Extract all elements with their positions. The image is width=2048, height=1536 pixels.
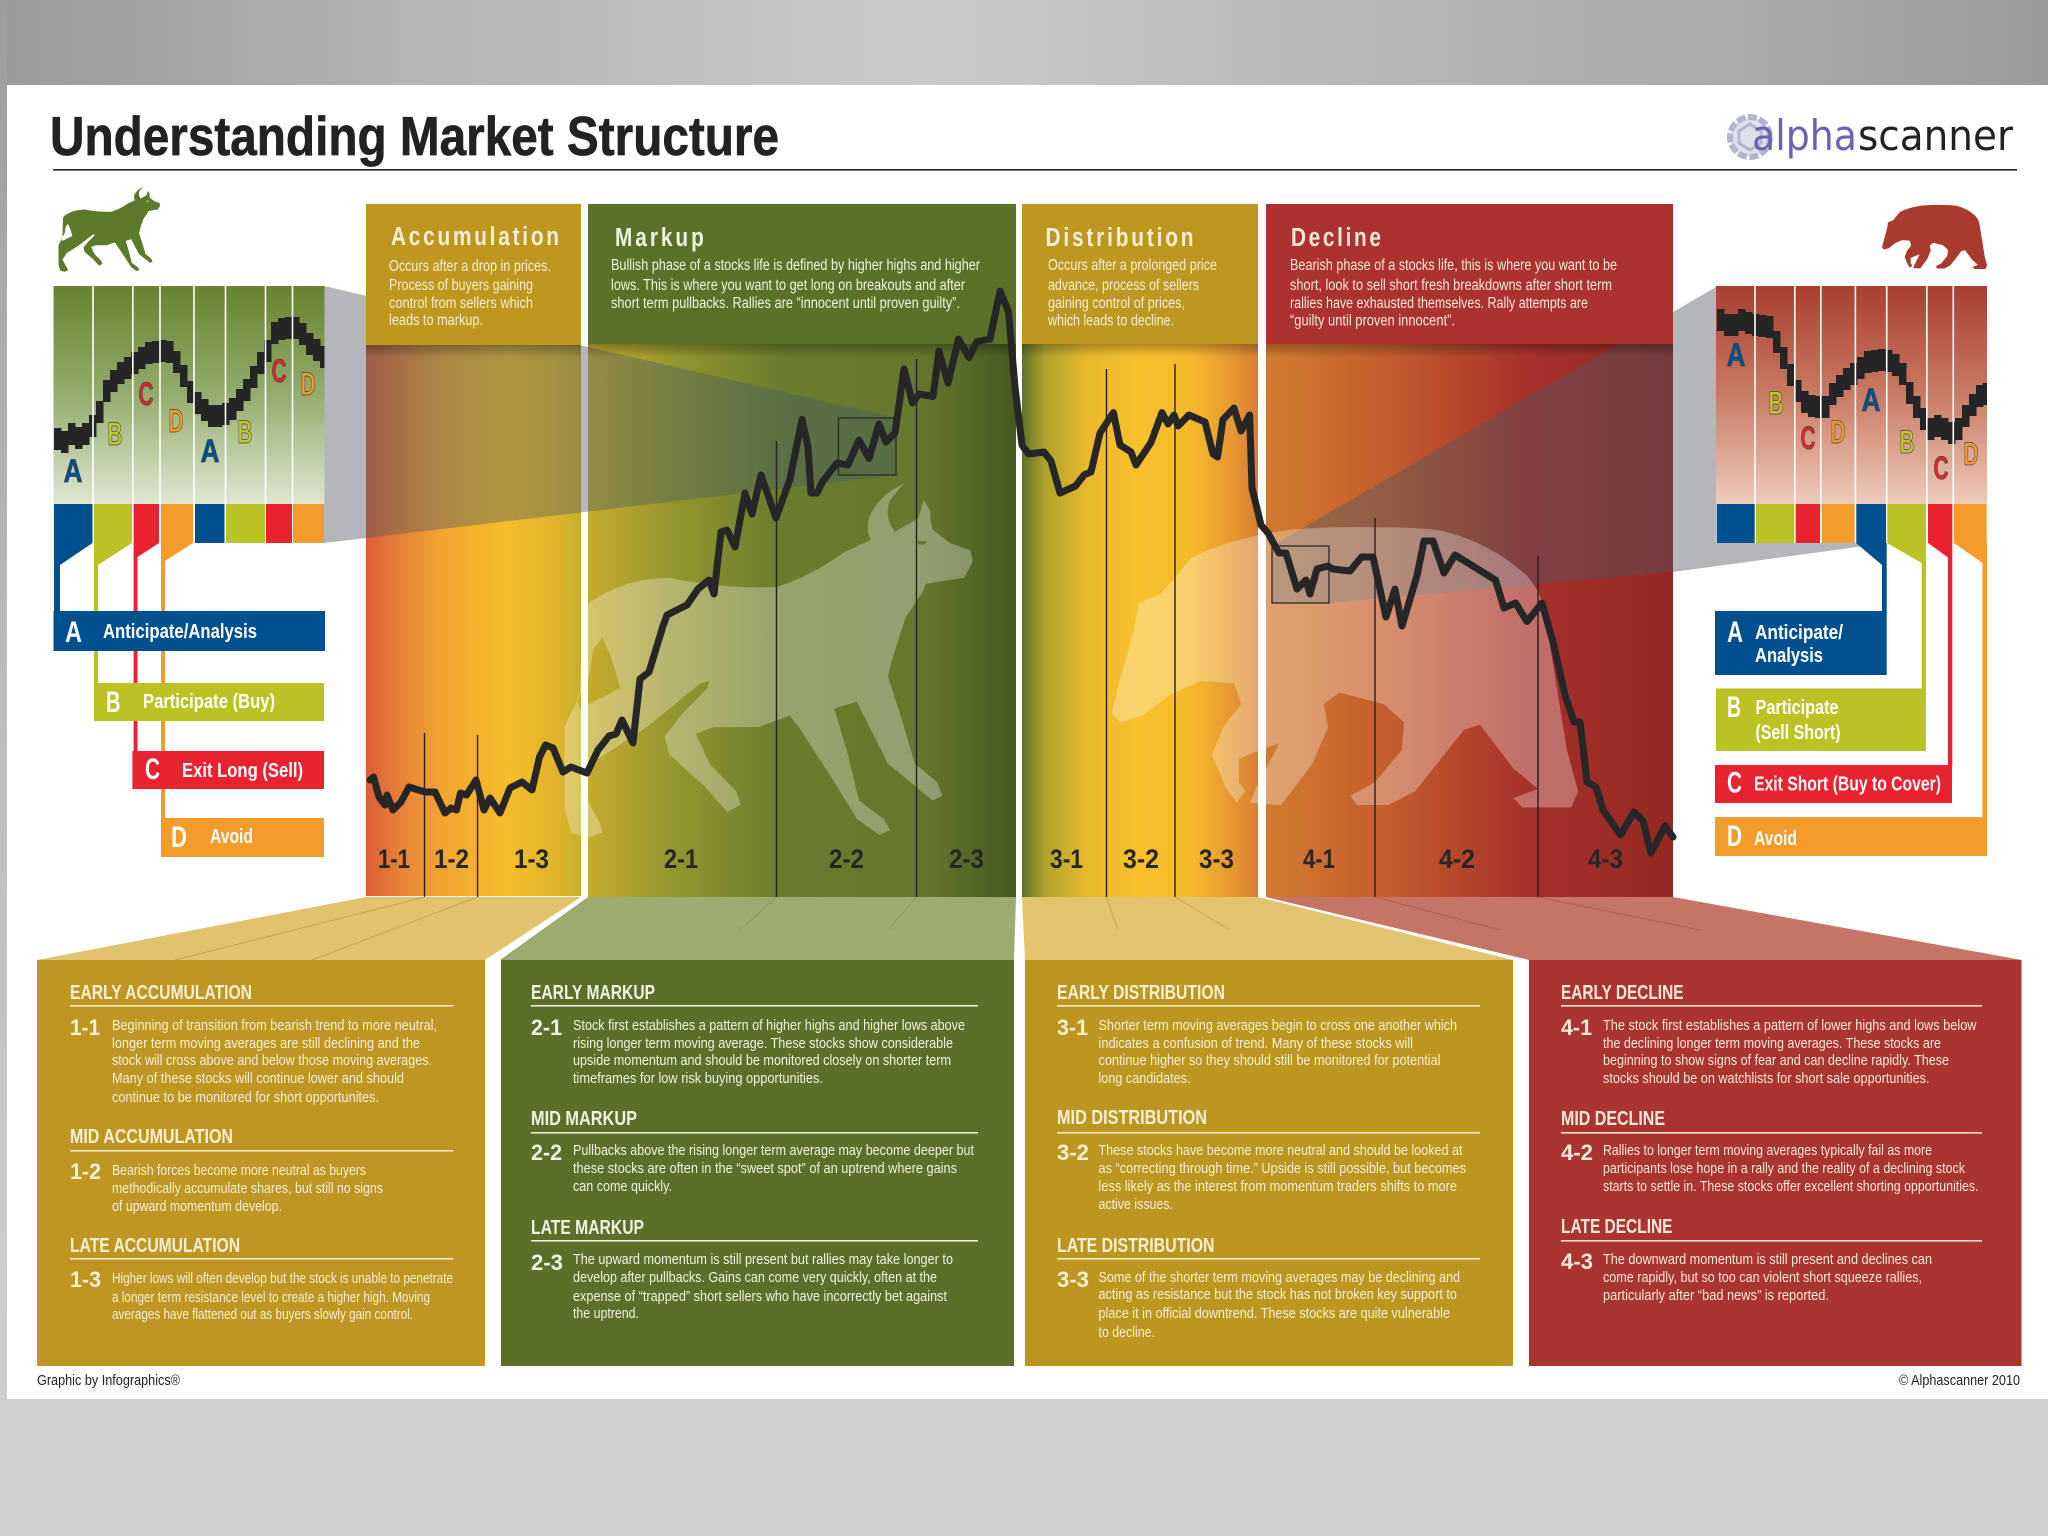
panel: accumulation details [37,960,485,1366]
text: stage 1-1 [112,1018,437,1106]
bar: C Exit Long: Exit Long (Sell) [182,760,303,782]
text: stage 2-1: Stock first establishes a pattern of higher highs and higher lows above [573,1018,965,1034]
heading: late accumulation: LATE ACCUMULATION [70,1235,240,1257]
bar: B Participate [94,683,324,721]
text: stage 4-3 [1603,1252,1932,1304]
bar: D Avoid [1715,817,1987,856]
mini chart phase letters: D [168,403,184,439]
stage 1-1: 1-1 [70,1015,100,1040]
text: stage 3-3: place it in official downtrend. These stocks are quite vulnerable [1098,1306,1450,1322]
perspective connector: markup [500,897,1016,960]
stage number labels: 4-1 [1303,844,1335,874]
stage 3-2: 3-2 [1057,1140,1089,1165]
mini chart phase letters: D [1830,414,1846,450]
text: stage 4-3: particularly after “bad news” is reported. [1603,1288,1829,1304]
text: decline description: “guilty until proven innocent”. [1290,312,1455,330]
stage number labels: 2-3 [949,844,984,874]
mini chart phase letters: B [238,414,252,450]
text: stage 2-1: rising longer term moving average. These stocks show considerable [573,1036,953,1052]
title rule [53,169,2017,171]
text: stage 2-2: can come quickly. [573,1179,672,1195]
bull projection over panels [366,345,896,538]
stage 1-3: 1-3 [70,1267,101,1292]
text: stage 1-2: methodically accumulate shares, but still no signs [112,1181,383,1197]
stage number labels: 3-1 [1050,844,1083,874]
bar: C Exit Short: C [1727,766,1742,800]
text: stage 4-3: come rapidly, but so too can violent short squeeze rallies, [1603,1270,1922,1286]
perspective connector: distribution [1022,897,1513,960]
icon: small bull [59,187,160,272]
mini chart phase letters [64,353,316,489]
mini chart phase letters: C [272,353,286,389]
bar: C Exit Short: Exit Short (Buy to Cover) [1754,774,1941,796]
panel: accumulation header [366,204,581,358]
text: stage 3-3: Some of the shorter term moving averages may be declining and [1098,1270,1460,1286]
text: stage 3-2: less likely as the interest from momentum traders shifts to more [1098,1179,1457,1195]
mini price line [54,317,324,453]
text: stage 3-2: as “correcting through time.” Upside is still possible, but becomes [1098,1161,1466,1177]
logo wordmark: scanner [1858,111,2014,160]
heading: mid distribution: MID DISTRIBUTION [1057,1107,1207,1129]
bar: B Participate: B [1727,691,1741,724]
text: accumulation description: Process of buyers gaining [389,277,533,294]
stage 2-3: 2-3 [531,1250,563,1275]
text: distribution description: which leads to decline. [1047,312,1174,330]
mini chart phase letters: A [1726,337,1746,373]
heading: late decline: LATE DECLINE [1561,1216,1672,1238]
text: stage 1-1: stock will cross above and below those moving averages. [112,1053,432,1069]
text: stage 2-1: upside momentum and should be monitored closely on shorter term [573,1053,951,1069]
text: stage 2-2: Pullbacks above the rising longer term average may become deeper but [573,1143,974,1159]
bar: A Anticipate/Analysis: Anticipate/Analysis [103,621,257,643]
text: stage 1-3: Higher lows will often develop but the stock is unable to penetrate [112,1271,453,1287]
text: stage 1-1: Beginning of transition from bearish trend to more neutral, [112,1018,437,1034]
text: stage 3-1: long candidates. [1098,1071,1190,1087]
text: stage 3-1: indicates a confusion of trend. Many of these stocks will [1098,1036,1413,1052]
text: distribution description: advance, process of sellers [1048,277,1199,294]
connector: B [1887,543,1926,690]
panel: decline header [1266,204,1673,357]
heading: mid markup: MID MARKUP [531,1108,637,1130]
mini chart phase letters: B [1900,424,1914,460]
heading: early markup: EARLY MARKUP [531,982,655,1004]
stage number labels: 1-1 [378,844,410,874]
icon: logo globe [1730,117,1770,157]
footer credit: Graphic by Infographics® [37,1373,180,1389]
text: stage 4-1: beginning to show signs of fear and can decline rapidly. These [1603,1053,1949,1069]
mini chart phase letters: C [1934,450,1948,486]
bear projection over panels [1272,344,1673,603]
text: stage 1-3 [112,1271,453,1323]
bar: B Participate: B [106,686,120,719]
mini chart phase letters: C [1800,420,1816,456]
large bull silhouette [564,484,973,837]
bull projection band [324,286,896,543]
mini chart phase letters: D [300,366,316,402]
zoom box: bull [838,418,896,475]
stage number labels: 1-2 [434,844,469,874]
bear projection band [1272,287,1887,603]
mini chart phase letters: C [138,376,154,412]
mini chart phase letters: B [108,416,122,452]
text: stage 1-1: continue to be monitored for short opportunites. [112,1090,379,1106]
bar: C Exit Short [1715,765,1952,803]
zoom box: bear [1272,546,1329,603]
icon: small bear [1882,205,1987,269]
panel: bear cycle mini chart [1716,286,1987,543]
stage 2-2: 2-2 [531,1140,562,1165]
stage 2-1: 2-1 [531,1015,562,1040]
text: markup description: short term pullbacks. Rallies are “innocent until proven guilty”. [611,295,960,312]
text: distribution description [1047,257,1217,330]
heading: markup: Markup [615,223,704,252]
panel: distribution header [1022,204,1258,357]
connector: A [54,543,92,612]
text: stage 3-3 [1098,1270,1460,1341]
stage 4-1: 4-1 [1561,1015,1592,1040]
bar: B Participate: Participate [1756,697,1838,719]
text: stage 1-1: Many of these stocks will continue lower and should [112,1071,404,1087]
bar: C Exit Long [132,751,324,789]
text: stage 1-2 [112,1163,383,1215]
heading: mid accumulation: MID ACCUMULATION [70,1126,233,1148]
text: decline description: short, look to sell short fresh breakdowns after short term [1290,277,1612,294]
mini chart phase letters: A [64,453,82,489]
text: decline description: Bearish phase of a stocks life, this is where you want to be [1290,257,1617,274]
logo wordmark: alpha [1752,111,1857,160]
text: accumulation description: Occurs after a drop in prices. [389,258,551,275]
heading: decline: Decline [1291,223,1381,252]
bar: A Anticipate/Analysis: Analysis [1755,645,1823,667]
text: stage 4-1: stocks should be on watchlists for short sale opportunities. [1603,1071,1930,1087]
heading: early accumulation: EARLY ACCUMULATION [70,982,252,1004]
panel: markup details [501,960,1014,1366]
heading: accumulation: Accumulation [391,222,559,251]
stage number labels: 3-2 [1123,844,1159,874]
heading: mid decline: MID DECLINE [1561,1108,1665,1130]
text: stage 3-2: active issues. [1098,1197,1173,1213]
text: stage 3-3: acting as resistance but the stock has not broken key support to [1098,1287,1457,1303]
text: stage 3-1: Shorter term moving averages begin to cross one another which [1098,1018,1457,1034]
text: stage 4-2: starts to settle in. These stocks offer excellent shorting opportunities. [1603,1179,1978,1195]
text: accumulation description: leads to markup. [389,312,483,329]
panel: markup header [588,204,1016,357]
bar: B Participate [1716,688,1926,751]
connector: D [1954,543,1987,818]
large bear silhouette [1112,527,1578,807]
text: stage 3-1: continue higher so they should still be monitored for potential [1098,1053,1440,1069]
text: stage 2-3 [573,1252,953,1322]
text: stage 4-1: the declining longer term moving averages. These stocks are [1603,1036,1941,1052]
title: Understanding Market Structure [50,105,779,167]
stage number labels: 1-3 [514,844,549,874]
bar: A Anticipate/Analysis: Anticipate/ [1755,622,1843,644]
stage number labels [378,844,1623,874]
legend: bull actions [54,543,325,857]
price line chart [370,291,1673,853]
mini chart colour key [54,504,324,543]
bar: B Participate: (Sell Short) [1756,722,1840,744]
text: stage 2-3: develop after pullbacks. Gains can come very quickly, often at the [573,1270,937,1286]
stage number labels: 2-1 [664,844,698,874]
text: decline description [1290,257,1617,330]
stage number labels: 2-2 [829,844,864,874]
panel: market phase chart backgrounds [366,344,1673,897]
mini chart phase letters: B [1768,385,1784,421]
text: stage 2-2: these stocks are often in the “sweet spot” of an uptrend where gains [573,1161,957,1177]
text: stage 4-2: Rallies to longer term moving averages typically fail as more [1603,1143,1932,1159]
connector: C [1928,543,1952,766]
bar: B Participate: Participate (Buy) [143,691,275,713]
text: stage 1-3: averages have flattened out as buyers slowly gain control. [112,1307,413,1323]
text: stage 1-3: a longer term resistance level to create a higher high. Moving [112,1290,430,1306]
text: stage 4-3: The downward momentum is still present and declines can [1603,1252,1932,1268]
text: distribution description: gaining control of prices, [1048,295,1185,312]
stage 1-2: 1-2 [70,1159,101,1184]
text: stage 3-2 [1098,1143,1466,1213]
heading: early decline: EARLY DECLINE [1561,982,1684,1004]
bar: A Anticipate/Analysis: A [1727,616,1743,649]
heading: late distribution: LATE DISTRIBUTION [1057,1235,1214,1257]
perspective connector: decline [1266,897,2022,960]
heading: distribution: Distribution [1046,223,1194,252]
text: stage 2-3: The upward momentum is still present but rallies may take longer to [573,1252,953,1268]
mini chart colour key [1717,504,1987,543]
mini price line [1717,309,1987,444]
text: stage 2-1 [573,1018,965,1087]
text: stage 2-1: timeframes for low risk buying opportunities. [573,1071,823,1087]
connector: D [161,543,193,818]
panel: decline details [1529,960,2022,1366]
connector: B [94,543,132,683]
stage number labels: 4-2 [1439,844,1475,874]
logo: alphascanner [1730,111,2014,160]
bar: A Anticipate/Analysis: A [65,616,82,649]
heading: late markup: LATE MARKUP [531,1217,644,1239]
connector: A [1856,543,1887,612]
text: stage 3-1 [1098,1018,1457,1087]
text: stage 1-1: longer term moving averages are still declining and the [112,1036,420,1052]
mini chart phase letters: A [200,433,220,469]
connector: C [134,543,159,751]
text: accumulation description: control from sellers which [389,295,533,312]
mini chart phase letters: D [1964,436,1978,472]
text: stage 3-2: These stocks have become more neutral and should be looked at [1098,1143,1462,1159]
bar: D Avoid: Avoid [210,826,253,848]
text: stage 4-1 [1603,1018,1977,1087]
bar: D Avoid [161,818,324,857]
panel: bull cycle mini chart [54,286,324,543]
stage 4-3: 4-3 [1561,1249,1593,1274]
text: markup description: lows. This is where you want to get long on breakouts and after [611,277,965,294]
text: stage 2-3: the uptrend. [573,1306,639,1322]
stage 4-2: 4-2 [1561,1140,1593,1165]
text: stage 4-1: The stock first establishes a pattern of lower highs and lows below [1603,1018,1977,1034]
legend: bear actions [1715,543,1987,856]
text: markup description: Bullish phase of a stocks life is defined by higher highs and higher [611,257,980,274]
text: stage 1-2: Bearish forces become more neutral as buyers [112,1163,366,1179]
bar: A Anticipate/Analysis [1715,611,1887,675]
text: stage 2-3: expense of “trapped” short sellers who have incorrectly bet against [573,1289,947,1305]
stage 3-1: 3-1 [1057,1015,1088,1040]
mini chart phase letters [1726,337,1978,486]
text: stage 4-2: participants lose hope in a rally and the reality of a declining stock [1603,1161,1966,1177]
text: distribution description: Occurs after a prolonged price [1048,257,1217,274]
text: stage 4-2 [1603,1143,1978,1195]
text: stage 3-3: to decline. [1098,1325,1155,1341]
stage number labels: 3-3 [1199,844,1234,874]
bar: D Avoid: Avoid [1754,828,1797,850]
text: accumulation description [389,258,551,329]
bar: D Avoid: D [1727,820,1742,853]
panel: distribution details [1025,960,1513,1366]
text: markup description [611,257,980,312]
stage 3-3: 3-3 [1057,1267,1089,1292]
footer copyright: © Alphascanner 2010 [1899,1373,2020,1389]
mini chart phase letters: A [1862,382,1880,418]
bar: D Avoid: D [171,821,187,854]
heading: early distribution: EARLY DISTRIBUTION [1057,982,1225,1004]
stage divider lines [424,359,1538,897]
text: decline description: rallies have exhausted themselves. Rally attempts are [1290,295,1588,312]
bar: C Exit Long: C [145,753,160,786]
perspective connector: accumulation [37,897,581,960]
stage number labels: 4-3 [1588,844,1623,874]
text: stage 2-2 [573,1143,974,1195]
bar: A Anticipate/Analysis [54,611,325,651]
text: stage 1-2: of upward momentum develop. [112,1199,282,1215]
